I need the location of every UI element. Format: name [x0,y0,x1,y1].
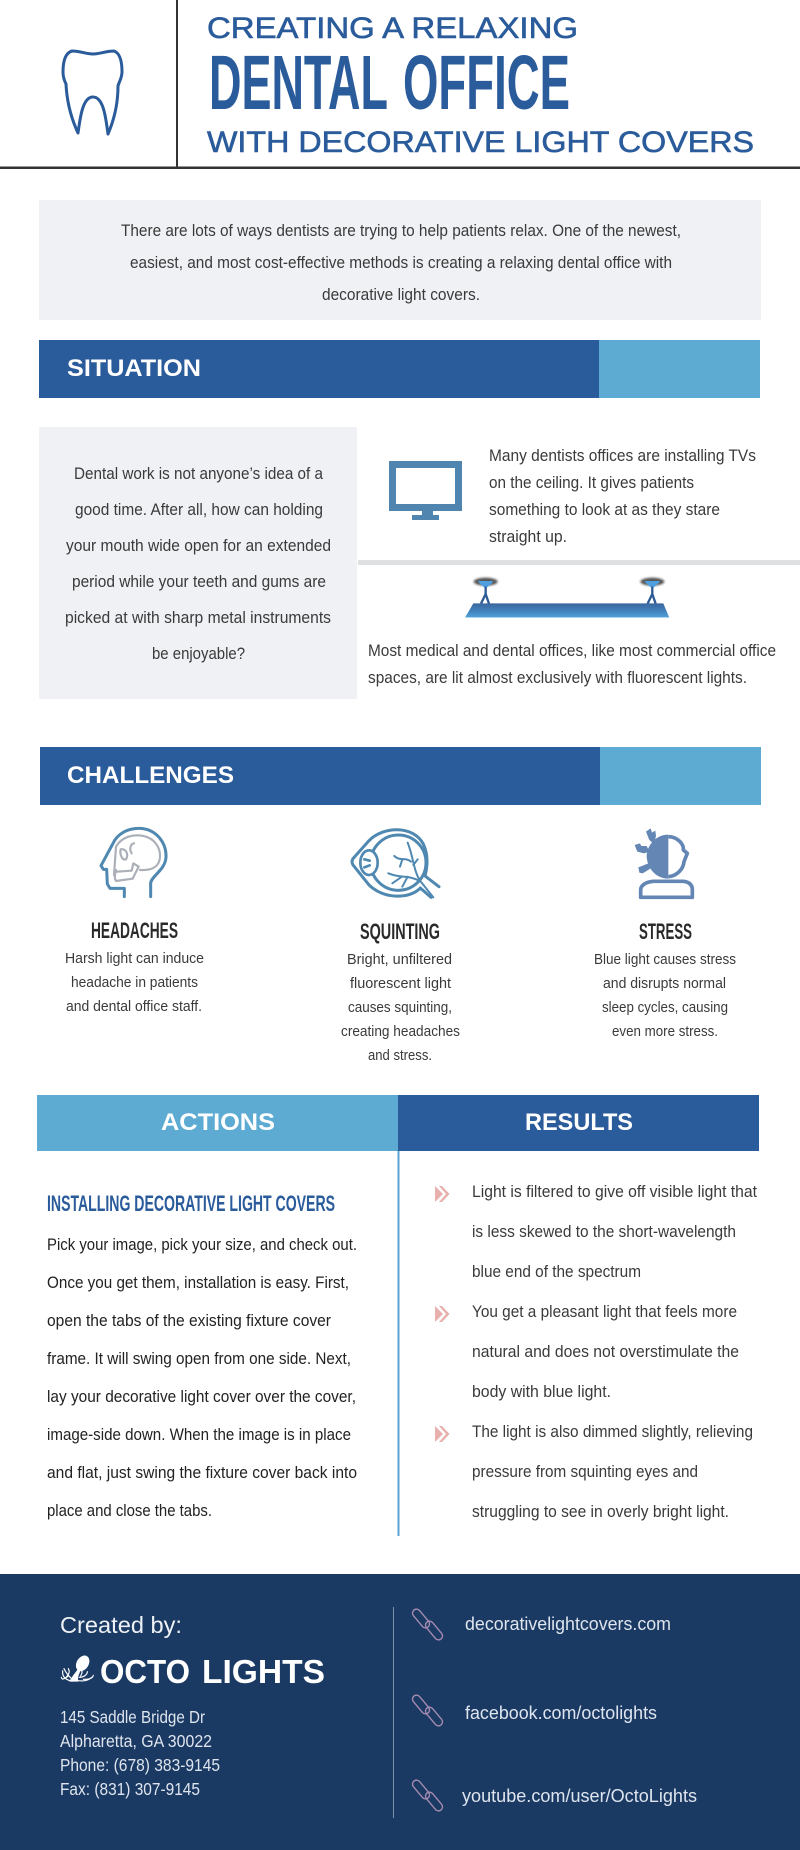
title: CREATING A RELAXING [207,12,578,45]
icon: hanging light fixture [465,578,669,618]
challenge: stress: STRESS [639,919,692,944]
panel: situation text: good time. After all, how can holding [75,500,323,519]
results text: The light is also dimmed slightly, relieving [472,1422,753,1441]
challenge: squinting: fluorescent light [350,976,451,992]
title: OFFICE [403,40,570,126]
icon: tooth [63,51,122,134]
icon: octopus [61,1653,93,1682]
address: Fax: (831) 307-9145 [60,1779,200,1799]
heading: results [398,1095,759,1151]
link: youtube: youtube.com/user/OctoLights [462,1786,697,1806]
heading: challenges [40,747,761,805]
text: tv on ceiling: something to look at as they stare [489,500,720,519]
challenge: headaches [65,828,204,1015]
link: facebook: facebook.com/octolights [465,1703,657,1723]
panel: actions text: and flat, just swing the fixture cover back into [47,1463,357,1482]
heading: actions: ACTIONS [161,1109,275,1136]
address [60,1707,220,1799]
icon: arrow 2 [435,1306,450,1322]
created by: Created by: [60,1612,182,1638]
results text: natural and does not overstimulate the [472,1342,739,1361]
challenge: squinting: and stress. [368,1048,432,1064]
panel: situation text: period while your teeth and gums are [72,572,326,591]
title: WITH DECORATIVE LIGHT COVERS [207,126,754,159]
address: Phone: (678) 383-9145 [60,1755,220,1775]
text: fluorescent lights [368,641,776,687]
panel: intro: There are lots of ways dentists are trying to help patients relax. One of the newest, [121,221,681,240]
challenge: squinting: Bright, unfiltered [347,952,452,968]
logo: octo lights: LIGHTS [202,1653,325,1690]
text: tv on ceiling: straight up. [489,527,567,546]
panel: actions text: Pick your image, pick your size, and check out. [47,1235,357,1254]
address: 145 Saddle Bridge Dr [60,1707,205,1727]
panel: actions text: image-side down. When the image is in place [47,1425,351,1444]
panel: situation text: your mouth wide open for an extended [66,536,331,555]
panel: actions text: lay your decorative light cover over the cover, [47,1387,356,1406]
results text: You get a pleasant light that feels more [472,1302,737,1321]
challenge: headaches: HEADACHES [91,918,178,943]
challenge: squinting [341,830,460,1064]
text: tv on ceiling: Many dentists offices are installing TVs [489,446,756,465]
challenge: stress: even more stress. [612,1024,718,1040]
link: website [411,1608,671,1641]
logo: octo lights [61,1653,325,1690]
panel: intro: decorative light covers. [322,285,480,304]
panel: intro: easiest, and most cost-effective methods is creating a relaxing dental office with [130,253,672,272]
header [0,0,800,169]
panel: intro [39,200,761,320]
challenge: stress: and disrupts normal [603,976,726,992]
icon: eye cross-section [352,830,439,897]
heading: challenges: CHALLENGES [67,762,234,789]
panel: situation text: picked at with sharp metal instruments [65,608,331,627]
panel: actions text: Once you get them, installation is easy. First, [47,1273,349,1292]
panel: actions text: open the tabs of the existing fixture cover [47,1311,331,1330]
challenge: squinting: SQUINTING [360,919,440,944]
link: facebook [411,1694,657,1727]
link: website: decorativelightcovers.com [465,1614,671,1634]
challenge: squinting: creating headaches [341,1024,460,1040]
challenge: stress: Blue light causes stress [594,952,736,968]
challenge: headaches: headache in patients [71,975,198,991]
footer [0,1574,800,1850]
results text: Light is filtered to give off visible light that [472,1182,757,1201]
heading: actions [37,1095,398,1151]
panel: situation text: Dental work is not anyone’s idea of a [74,464,323,483]
challenge: squinting: causes squinting, [348,1000,452,1016]
results text: struggling to see in overly bright light. [472,1502,729,1521]
address: Alpharetta, GA 30022 [60,1731,212,1751]
icon: arrow 1 [435,1186,450,1202]
results text: pressure from squinting eyes and [472,1462,698,1481]
link: youtube [411,1779,697,1812]
panel: situation text: be enjoyable? [152,644,245,663]
title: DENTAL [209,40,388,126]
results text: blue end of the spectrum [472,1262,641,1281]
results text [472,1182,757,1521]
challenge: stress [594,828,736,1040]
icon: arrow 3 [435,1426,450,1442]
text: fluorescent lights: spaces, are lit almost exclusively with fluorescent lights. [368,668,747,687]
panel: actions text: place and close the tabs. [47,1501,212,1520]
icon: tv [389,461,462,520]
icon: head with skull [101,828,166,897]
panel: actions text: INSTALLING DECORATIVE LIGHT COVERS [47,1191,335,1216]
panel: situation text [39,427,357,699]
challenge: headaches: Harsh light can induce [65,951,204,967]
heading: situation [39,340,760,398]
logo: octo lights: OCTO [100,1653,190,1690]
challenge: headaches: and dental office staff. [66,999,202,1015]
heading: situation: SITUATION [67,355,201,382]
results text: body with blue light. [472,1382,611,1401]
panel: actions text: frame. It will swing open from one side. Next, [47,1349,351,1368]
text: tv on ceiling [489,446,756,546]
challenge: stress: sleep cycles, causing [602,1000,728,1016]
results text: is less skewed to the short-wavelength [472,1222,736,1241]
text: tv on ceiling: on the ceiling. It gives patients [489,473,694,492]
heading: results: RESULTS [525,1109,633,1136]
panel: actions text [47,1191,357,1520]
icon: stressed head [635,828,692,897]
panel: results list [435,1182,757,1521]
title [207,12,754,159]
